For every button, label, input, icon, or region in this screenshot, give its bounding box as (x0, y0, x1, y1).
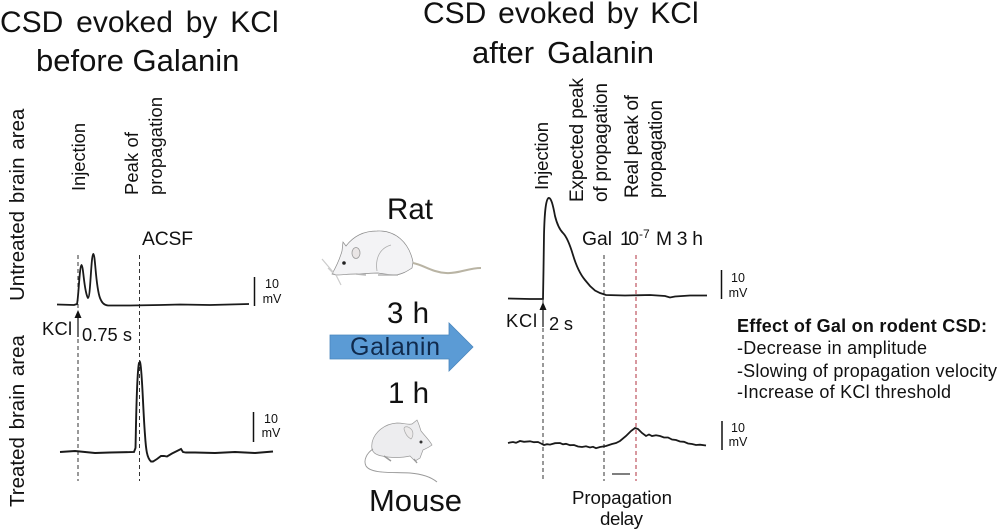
text block: effect of Gal on rodent CSD: -Slowing of propagation velocity (737, 361, 997, 381)
label: untreated brain area: Untreated brain area (6, 108, 29, 301)
scale bar: treated: 10 (264, 412, 278, 426)
label: expected peak of propagation (567, 78, 612, 202)
text block: effect of Gal on rodent CSD (737, 316, 997, 402)
title: after Galanin: after Galanin (472, 35, 654, 70)
scale bar: bottom right: mV (729, 435, 748, 449)
scale bar: bottom right (722, 421, 748, 450)
text block: effect of Gal on rodent CSD: -Decrease in amplitude (737, 338, 927, 358)
scale bar: bottom right: 10 (731, 421, 745, 435)
label: injection left: Injection (68, 123, 89, 191)
label: peak of propagation left: propagation (145, 97, 166, 195)
trace: after galanin (508, 428, 706, 448)
label: ACSF: ACSF (142, 229, 193, 250)
label: expected peak of propagation: of propagation (591, 83, 612, 202)
label: propagation delay: delay (600, 508, 644, 529)
KCl arrow right: KCl (506, 310, 537, 331)
trace: KCl before galanin effect (508, 198, 707, 299)
label: propagation delay (572, 487, 672, 529)
scale bar: top right: mV (729, 286, 748, 300)
scale bar: untreated (254, 277, 282, 306)
scale bar: untreated: mV (263, 292, 282, 306)
label: propagation delay: Propagation (572, 487, 672, 508)
KCl arrow left: KCl (42, 318, 72, 339)
label: peak of propagation left (121, 97, 166, 195)
label: Gal concentration: 10 (620, 229, 639, 250)
KCl arrow left: 0.75 s (82, 324, 132, 345)
KCl arrow right (506, 302, 573, 334)
label: injection right: Injection (531, 122, 552, 190)
title: before Galanin: before Galanin (36, 43, 239, 78)
label: 1 h: 1 h (388, 377, 429, 410)
arrow: Galanin (330, 323, 473, 371)
scale bar: treated: mV (262, 426, 281, 440)
propagation delay bar (612, 473, 630, 475)
KCl arrow right: 2 s (549, 313, 573, 334)
dashed lines right (543, 255, 636, 481)
label: real peak of propagation (622, 94, 667, 198)
label: expected peak of propagation: Expected peak (567, 78, 588, 202)
title: after Galanin (423, 0, 699, 70)
scale bar: untreated: 10 (265, 277, 279, 291)
icon: mouse (365, 420, 437, 482)
label: Gal concentration: Gal (582, 229, 612, 250)
label: 3 h: 3 h (387, 297, 429, 330)
scale bar: treated (254, 412, 281, 442)
trace: untreated ACSF (57, 254, 249, 306)
scale bar: top right (722, 270, 748, 300)
title: before Galanin (0, 6, 279, 78)
title: before Galanin: CSD evoked by KCl (0, 6, 279, 39)
scale bar: top right: 10 (731, 271, 745, 285)
label: treated brain area: Treated brain area (6, 335, 29, 507)
label: peak of propagation left: Peak of (121, 131, 142, 195)
arrow: Galanin: Galanin (350, 333, 440, 361)
icon: rat (322, 231, 481, 285)
label: Mouse: Mouse (369, 483, 462, 518)
label: real peak of propagation: propagation (646, 100, 667, 198)
trace: treated (60, 362, 273, 462)
text block: effect of Gal on rodent CSD: -Increase of KCl threshold (737, 382, 951, 402)
text block: effect of Gal on rodent CSD: Effect of Gal on rodent CSD: (737, 316, 987, 336)
label: Gal concentration: -7 (639, 227, 650, 241)
label: Rat: Rat (387, 193, 433, 226)
label: Gal concentration (582, 227, 703, 250)
label: real peak of propagation: Real peak of (622, 94, 643, 198)
dashed lines left (78, 255, 140, 481)
KCl arrow left (42, 310, 132, 345)
label: Gal concentration: M 3 h (656, 229, 703, 250)
